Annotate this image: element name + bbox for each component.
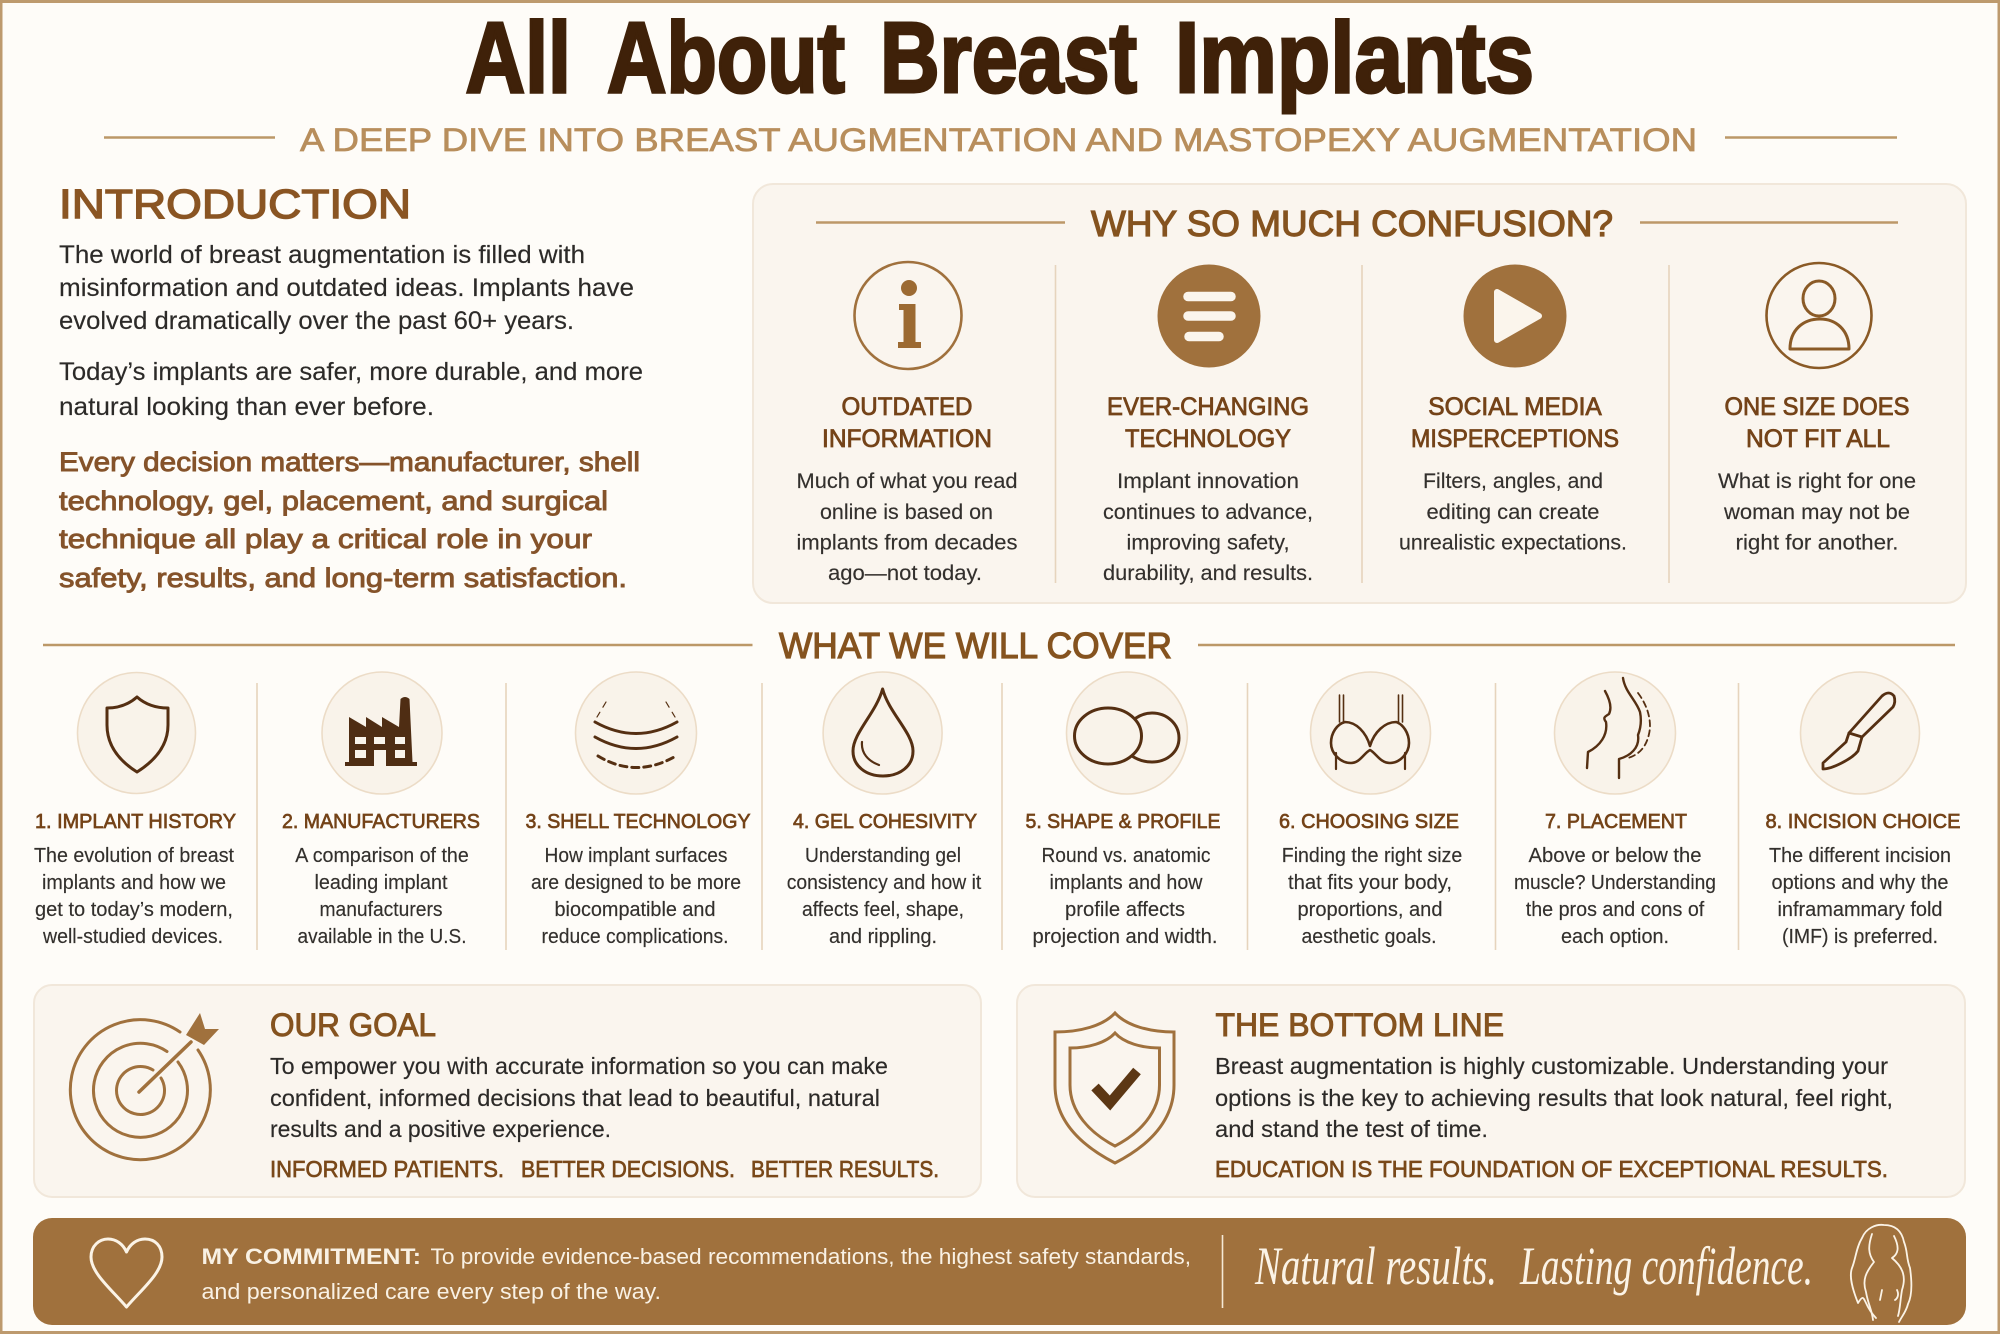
title: Breast: [880, 2, 1137, 114]
cover item 7: placement: [1514, 672, 1716, 948]
cover item 3: shell technology: 3. SHELL TECHNOLOGY: [526, 810, 751, 833]
title: About: [607, 2, 845, 114]
cover item 6: choosing size: 6. CHOOSING SIZE: [1279, 810, 1459, 833]
cover item 5: shape and profile: Round vs. anatomic: [1042, 845, 1210, 867]
panel: introduction: [59, 181, 643, 593]
text block: outdated information: Much of what you read: [796, 469, 1018, 493]
heading: our goal: OUR GOAL: [270, 1007, 436, 1043]
cover item 7: placement: each option.: [1561, 926, 1669, 948]
icon: shield with check: [1055, 1013, 1174, 1163]
cover item 7: placement: muscle? Understanding: [1514, 872, 1716, 894]
cover item 8: incision choice: (IMF) is preferred.: [1782, 926, 1938, 948]
text block: social media misperceptions: unrealistic expectations.: [1399, 530, 1627, 554]
banner: my commitment: [33, 1218, 1966, 1325]
cover item 3: shell technology: biocompatible and: [554, 899, 716, 921]
heading: the bottom line: THE BOTTOM LINE: [1216, 1007, 1504, 1043]
text block: goal description: To empower you with accurate information so you can make: [270, 1053, 888, 1079]
cover item 2: manufacturers: available in the U.S.: [298, 926, 466, 948]
text block: commitment statement: [202, 1244, 1191, 1304]
text block: commitment statement: MY COMMITMENT:: [202, 1244, 421, 1269]
icon: factory: [322, 672, 442, 794]
text block: one size does not fit all: woman may not be: [1723, 500, 1910, 524]
heading: introduction: INTRODUCTION: [59, 181, 411, 227]
cover item 7: placement: Above or below the: [1528, 845, 1702, 867]
subtitle: A DEEP DIVE INTO BREAST AUGMENTATION AND MASTOPEXY AUGMENTATION: [300, 122, 1697, 158]
icon: person: [1766, 263, 1872, 368]
icon: bra: [1310, 672, 1430, 794]
script tagline: [1254, 1236, 1813, 1296]
icon: profile placement: [1554, 672, 1676, 794]
icon: information: [854, 262, 962, 369]
text block: outdated information: [796, 393, 1018, 585]
cover item 2: manufacturers: leading implant: [314, 872, 448, 894]
cover item 2: manufacturers: [282, 672, 480, 948]
cover item 4: gel cohesivity: and rippling.: [829, 926, 937, 948]
icon: heart: [91, 1239, 162, 1307]
cover item 3: shell technology: How implant surfaces: [544, 845, 728, 867]
icon: gel drop: [823, 672, 942, 794]
cover item 6: choosing size: Finding the right size: [1282, 845, 1462, 867]
cover item 6: choosing size: aesthetic goals.: [1302, 926, 1436, 948]
tagline: informed patients: BETTER RESULTS.: [751, 1156, 939, 1182]
cover item 3: shell technology: are designed to be more: [531, 872, 741, 894]
text block: ever-changing technology: continues to advance,: [1103, 500, 1313, 524]
text block: bottom line description: options is the key to achieving results that look natural, feel right,: [1215, 1085, 1893, 1111]
cover item 2: manufacturers: manufacturers: [320, 899, 442, 921]
cover item 1: implant history: [34, 672, 236, 948]
cover item 4: gel cohesivity: [787, 672, 982, 948]
text block: ever-changing technology: improving safety,: [1126, 530, 1290, 554]
cover item 8: incision choice: inframammary fold: [1778, 899, 1942, 921]
text block: commitment statement: and personalized care every step of the way.: [202, 1279, 661, 1304]
panel: the bottom line: [1017, 985, 1965, 1197]
cover item 4: gel cohesivity: affects feel, shape,: [802, 899, 964, 921]
cover item 3: shell technology: [526, 672, 751, 948]
icon: target with arrow: [70, 1013, 219, 1160]
title: [466, 2, 1534, 114]
text block: one size does not fit all: [1718, 393, 1916, 554]
cover item 2: manufacturers: A comparison of the: [295, 845, 469, 867]
text block: intro emphasis: Every decision matters—manufacturer, shell: [59, 447, 640, 477]
cover item 1: implant history: The evolution of breast: [34, 845, 234, 867]
tagline: informed patients: BETTER DECISIONS.: [521, 1156, 735, 1182]
cover item 8: incision choice: 8. INCISION CHOICE: [1766, 810, 1960, 833]
cover item 1: implant history: get to today’s modern,: [35, 899, 233, 921]
cover item 6: choosing size: [1279, 672, 1462, 948]
heading: why so much confusion: WHY SO MUCH CONFUSION?: [1091, 203, 1613, 244]
icon: scalpel: [1800, 672, 1920, 794]
title: All: [466, 2, 571, 114]
icon: shield: [78, 672, 196, 794]
icon: play: [1464, 264, 1566, 368]
text block: outdated information: ago—not today.: [828, 561, 982, 585]
text block: social media misperceptions: SOCIAL MEDIA: [1428, 393, 1602, 421]
cover item 6: choosing size: proportions, and: [1298, 899, 1442, 921]
text block: intro emphasis: technology, gel, placement, and surgical: [59, 486, 608, 516]
cover item 4: gel cohesivity: consistency and how it: [787, 872, 982, 894]
text block: ever-changing technology: [1103, 393, 1313, 585]
text block: goal description: confident, informed decisions that lead to beautiful, natural: [270, 1085, 880, 1111]
cover item 2: manufacturers: 2. MANUFACTURERS: [282, 810, 480, 833]
title: Implants: [1175, 2, 1534, 114]
text block: intro paragraph 2: Today’s implants are safer, more durable, and more: [59, 358, 643, 386]
cover item 5: shape and profile: 5. SHAPE & PROFILE: [1026, 810, 1220, 833]
cover item 4: gel cohesivity: Understanding gel: [805, 845, 961, 867]
cover item 8: incision choice: The different incision: [1769, 845, 1951, 867]
text block: social media misperceptions: editing can create: [1426, 500, 1600, 524]
text block: bottom line description: and stand the test of time.: [1215, 1116, 1488, 1142]
text block: intro paragraph 2: [59, 358, 643, 421]
cover item 4: gel cohesivity: 4. GEL COHESIVITY: [793, 810, 977, 833]
script tagline: Natural results.: [1254, 1236, 1497, 1296]
cover item 5: shape and profile: implants and how: [1050, 872, 1203, 894]
cover item 1: implant history: 1. IMPLANT HISTORY: [35, 810, 236, 833]
panel: our goal: [34, 985, 981, 1197]
cover item 5: shape and profile: [1026, 672, 1220, 948]
icon: woman silhouette: [1851, 1225, 1911, 1322]
text block: ever-changing technology: Implant innovation: [1117, 469, 1299, 493]
text block: intro emphasis: [59, 447, 640, 593]
cover item 1: implant history: implants and how we: [42, 872, 226, 894]
panel: why so much confusion: [753, 184, 1966, 603]
cover item 3: shell technology: reduce complications.: [542, 926, 728, 948]
tagline: informed patients: [270, 1156, 939, 1182]
text block: goal description: results and a positive experience.: [270, 1116, 611, 1142]
text block: outdated information: OUTDATED: [842, 393, 972, 421]
text block: intro paragraph 2: natural looking than ever before.: [59, 393, 434, 421]
text block: social media misperceptions: MISPERCEPTIONS: [1411, 425, 1619, 453]
text block: one size does not fit all: NOT FIT ALL: [1746, 425, 1890, 453]
text block: goal description: [270, 1053, 888, 1142]
text block: intro emphasis: technique all play a critical role in your: [59, 524, 592, 554]
text block: commitment statement: To provide evidence-based recommendations, the highest safety standards,: [430, 1244, 1191, 1269]
text block: outdated information: INFORMATION: [822, 425, 992, 453]
text block: one size does not fit all: ONE SIZE DOES: [1724, 393, 1910, 421]
cover item 6: choosing size: that fits your body,: [1288, 872, 1452, 894]
tagline: informed patients: INFORMED PATIENTS.: [270, 1156, 504, 1182]
heading: what we will cover: WHAT WE WILL COVER: [779, 625, 1172, 666]
text block: one size does not fit all: What is right for one: [1718, 469, 1916, 493]
script tagline: Lasting confidence.: [1519, 1236, 1813, 1296]
cover item 5: shape and profile: profile affects: [1065, 899, 1185, 921]
text block: intro paragraph 1: misinformation and outdated ideas. Implants have: [59, 274, 634, 302]
text block: bottom line description: Breast augmentation is highly customizable. Understanding your: [1215, 1053, 1888, 1079]
text block: intro paragraph 1: [59, 241, 634, 335]
text block: intro paragraph 1: The world of breast augmentation is filled with: [59, 241, 585, 269]
cover item 5: shape and profile: projection and width.: [1032, 926, 1218, 948]
cover item 1: implant history: well-studied devices.: [42, 926, 223, 948]
text block: ever-changing technology: TECHNOLOGY: [1125, 425, 1291, 453]
cover item 7: placement: 7. PLACEMENT: [1545, 810, 1687, 833]
cover item 7: placement: the pros and cons of: [1526, 899, 1705, 921]
icon: overlapping implants: [1066, 672, 1188, 794]
text block: social media misperceptions: Filters, angles, and: [1423, 469, 1603, 493]
icon: menu lines: [1158, 264, 1260, 368]
text block: intro emphasis: safety, results, and long-term satisfaction.: [59, 563, 627, 593]
text block: ever-changing technology: durability, and results.: [1103, 561, 1313, 585]
text block: bottom line description: [1215, 1053, 1893, 1142]
text block: intro paragraph 1: evolved dramatically over the past 60+ years.: [59, 307, 574, 335]
cover item 8: incision choice: options and why the: [1772, 872, 1948, 894]
text block: one size does not fit all: right for another.: [1736, 530, 1898, 554]
text block: ever-changing technology: EVER-CHANGING: [1107, 393, 1309, 421]
tagline: education: EDUCATION IS THE FOUNDATION OF EXCEPTIONAL RESULTS.: [1215, 1156, 1888, 1182]
icon: shell layers: [576, 672, 696, 794]
text block: social media misperceptions: [1399, 393, 1627, 554]
text block: outdated information: implants from decades: [796, 530, 1018, 554]
cover item 8: incision choice: [1766, 672, 1960, 948]
text block: outdated information: online is based on: [820, 500, 993, 524]
